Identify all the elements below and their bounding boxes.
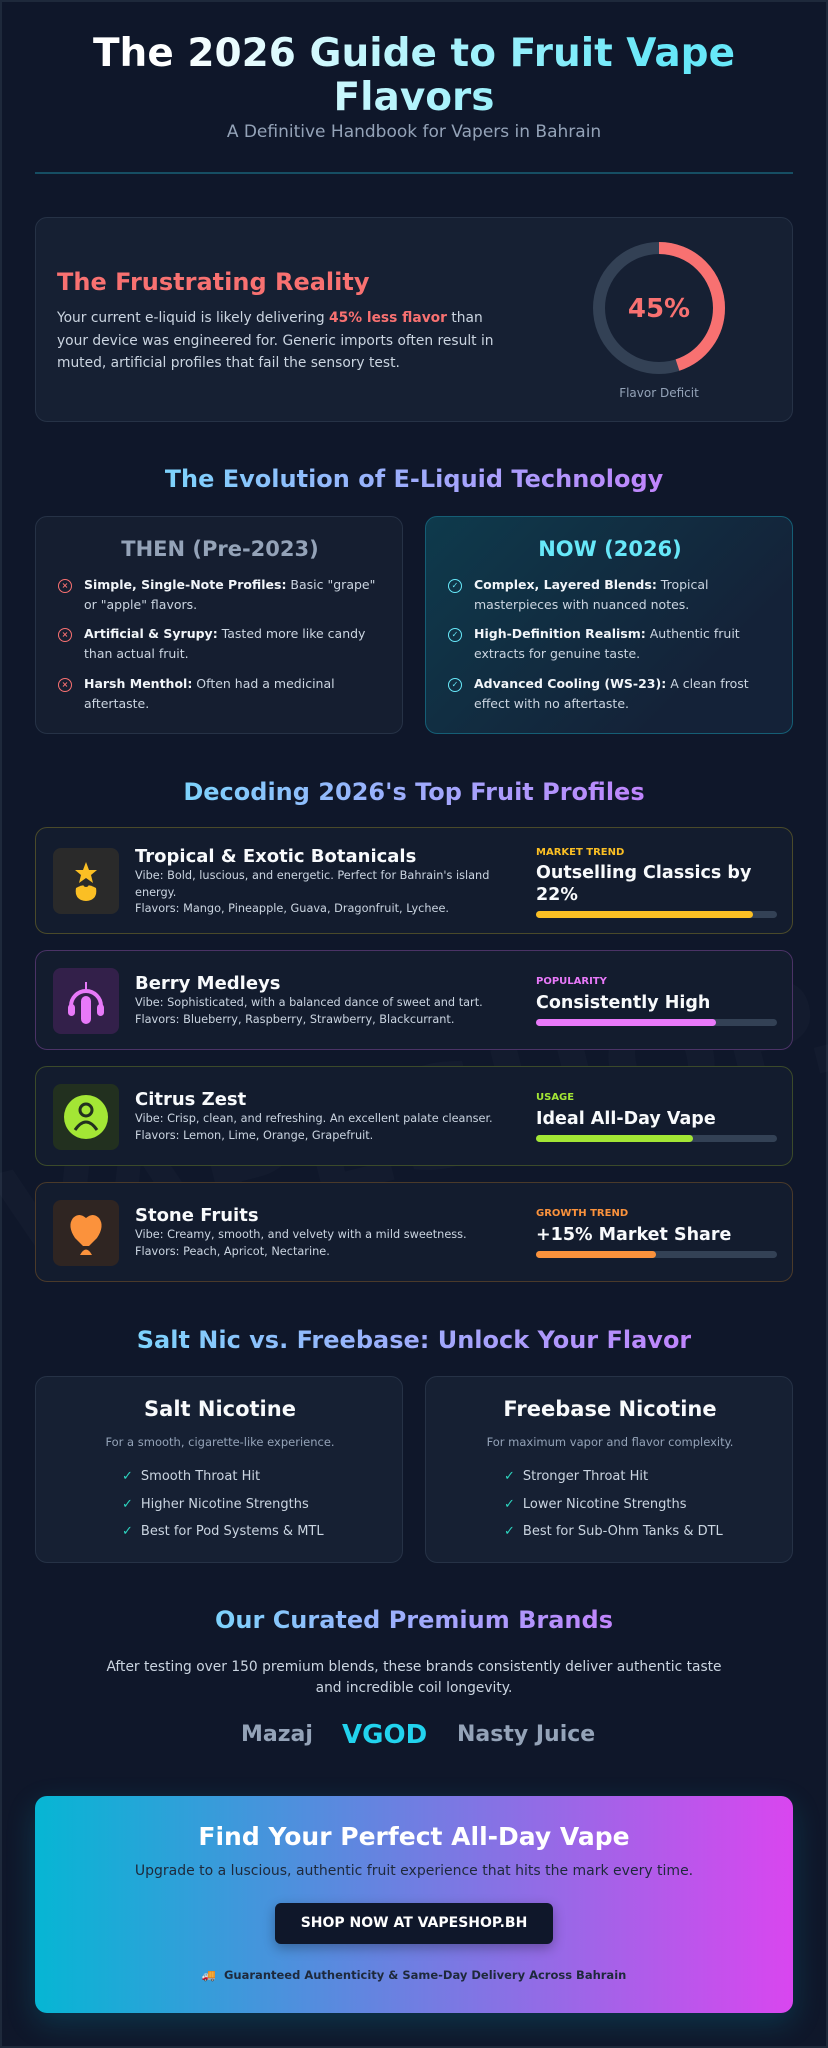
panel: then: Simple, Single-Note Profiles: Basic "grape" — [84, 577, 375, 592]
body text: Your current e-liquid is likely delivering 45% less flavor than your device was engineered for. Generic imports often result in muted, artificial profiles that fail the sensory test. — [57, 310, 494, 371]
heading: salt vs freebase: Salt Nic vs. Freebase: Unlock Your Flavor — [137, 1326, 691, 1354]
panel: then — [35, 516, 403, 734]
title — [0, 32, 828, 120]
panel: citrus: Vibe: Crisp, clean, and refreshing. An excellent palate cleanser. — [135, 1112, 493, 1125]
panel: citrus: USAGE — [536, 1092, 574, 1103]
title: Flavors — [334, 75, 494, 120]
panel: freebase nicotine: ✓ Stronger Throat Hit — [504, 1469, 648, 1484]
panel: then: × — [62, 680, 68, 689]
panel: freebase nicotine: For maximum vapor and flavor complexity. — [487, 1435, 733, 1449]
panel: freebase nicotine: ✓ Lower Nicotine Strengths — [504, 1497, 687, 1512]
panel: then: THEN (Pre-2023) — [121, 537, 319, 561]
panel: citrus: Ideal All-Day Vape — [536, 1109, 716, 1129]
panel: stone fruits: Stone Fruits — [135, 1205, 259, 1226]
brands text: and incredible coil longevity. — [316, 1680, 512, 1696]
CTA panel — [35, 1796, 793, 2013]
panel: now: Advanced Cooling (WS-23): A clean frost effect with no aftertaste. — [474, 676, 749, 711]
heading: brands: Our Curated Premium Brands — [215, 1606, 613, 1634]
panel: then: × — [62, 581, 68, 590]
panel: now: ✓ — [452, 680, 458, 689]
panel: stone fruits: Flavors: Peach, Apricot, Nectarine. — [135, 1244, 330, 1258]
icon: berry — [53, 968, 119, 1034]
subtitle: A Definitive Handbook for Vapers in Bahrain — [227, 122, 601, 142]
panel: berry: POPULARITY — [536, 976, 607, 987]
panel: stone fruits: Vibe: Creamy, smooth, and velvety with a mild sweetness. — [135, 1228, 467, 1241]
panel: frustrating reality — [35, 217, 793, 422]
panel: berry: Flavors: Blueberry, Raspberry, Strawberry, Blackcurrant. — [135, 1012, 454, 1026]
title: The 2026 Guide to Fruit Vape — [93, 31, 735, 76]
panel: then: × — [62, 630, 68, 639]
panel: berry: Berry Medleys — [135, 973, 281, 994]
CTA subtitle: Upgrade to a luscious, authentic fruit experience that hits the mark every time. — [135, 1863, 693, 1879]
panel: tropical: MARKET TREND — [536, 847, 624, 858]
donut chart — [593, 242, 725, 400]
delivery note: 🚚 Guaranteed Authenticity & Same-Day Delivery Across Bahrain — [202, 1968, 626, 1982]
brand logos — [241, 1720, 595, 1750]
panel: citrus: Citrus Zest — [135, 1089, 246, 1110]
panel: now — [425, 516, 793, 734]
donut chart: 45% — [628, 294, 690, 324]
panel: now: High-Definition Realism: Authentic fruit extracts for genuine taste. — [474, 626, 740, 661]
panel: salt nicotine: For a smooth, cigarette-like experience. — [105, 1435, 335, 1449]
panel: stone fruits: +15% Market Share — [536, 1225, 731, 1245]
panel: tropical: Vibe: Bold, luscious, and energetic. Perfect for Bahrain's island energy. — [135, 869, 489, 898]
panel: tropical: Outselling Classics by 22% — [536, 863, 751, 905]
panel: salt nicotine: Salt Nicotine — [144, 1397, 296, 1421]
panel: berry: Consistently High — [536, 993, 710, 1013]
donut chart: Flavor Deficit — [619, 386, 699, 400]
panel: salt nicotine: ✓ Best for Pod Systems & MTL — [122, 1524, 324, 1539]
panel: now: ✓ — [452, 581, 458, 590]
heading: evolution: The Evolution of E-Liquid Technology — [165, 465, 663, 493]
panel: stone fruits: GROWTH TREND — [536, 1208, 628, 1219]
brand logos: Nasty Juice — [457, 1722, 595, 1747]
panel: stone fruits — [35, 1182, 793, 1282]
panel: tropical — [35, 827, 793, 934]
panel: then: Artificial & Syrupy: Tasted more like candy than actual fruit. — [84, 626, 365, 661]
icon: star fruit — [53, 848, 119, 914]
brands text — [106, 1659, 722, 1696]
panel: freebase nicotine: ✓ Best for Sub-Ohm Tanks & DTL — [504, 1524, 723, 1539]
panel: berry: Vibe: Sophisticated, with a balanced dance of sweet and tart. — [135, 996, 483, 1009]
panel: tropical: Tropical & Exotic Botanicals — [135, 846, 416, 867]
heading: The Frustrating Reality — [57, 268, 370, 296]
panel: then: Harsh Menthol: Often had a medicinal aftertaste. — [84, 676, 335, 711]
panel: citrus — [35, 1066, 793, 1166]
panel: now: Complex, Layered Blends: Tropical masterpieces with nuanced notes. — [474, 577, 709, 612]
panel: salt nicotine: ✓ Higher Nicotine Strengths — [122, 1497, 309, 1512]
panel: freebase nicotine — [425, 1376, 793, 1563]
button — [275, 1903, 553, 1944]
panel: citrus: Flavors: Lemon, Lime, Orange, Grapefruit. — [135, 1128, 373, 1142]
icon: peach — [53, 1200, 119, 1266]
button: SHOP NOW AT VAPESHOP.BH — [301, 1915, 527, 1931]
panel: berry — [35, 950, 793, 1050]
brands text: After testing over 150 premium blends, these brands consistently deliver authentic taste — [106, 1659, 722, 1675]
brand logos: VGOD — [342, 1720, 427, 1750]
heading: profiles: Decoding 2026's Top Fruit Profiles — [183, 778, 645, 806]
panel: now: ✓ — [452, 630, 458, 639]
panel: now: NOW (2026) — [538, 537, 682, 561]
icon: citrus — [53, 1084, 119, 1150]
panel: tropical: Flavors: Mango, Pineapple, Guava, Dragonfruit, Lychee. — [135, 902, 449, 915]
CTA title: Find Your Perfect All-Day Vape — [198, 1822, 630, 1851]
panel: salt nicotine: ✓ Smooth Throat Hit — [122, 1469, 260, 1484]
panel: salt nicotine — [35, 1376, 403, 1563]
panel: then: or "apple" flavors. — [84, 597, 197, 612]
panel: freebase nicotine: Freebase Nicotine — [503, 1397, 717, 1421]
brand logos: Mazaj — [241, 1722, 313, 1747]
